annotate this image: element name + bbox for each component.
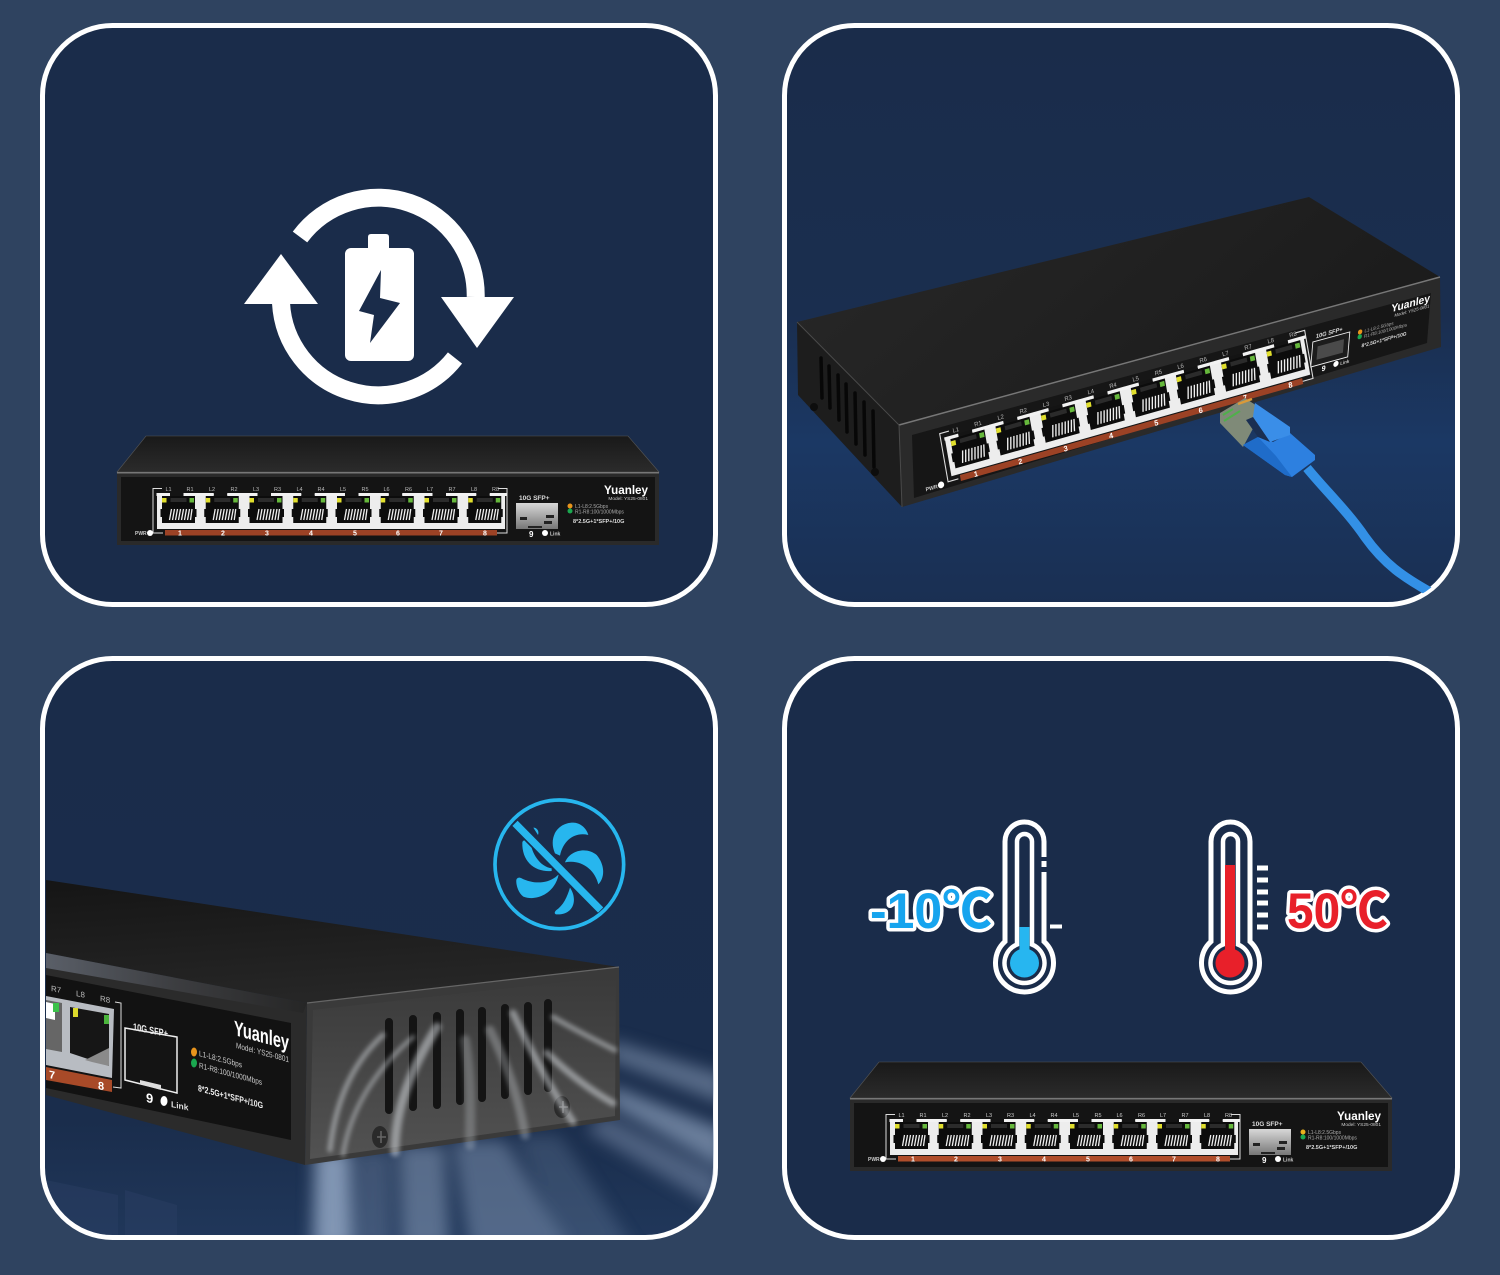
switch: front view: R3 (1007, 1113, 1014, 1119)
switch: close-up of vented side: R7 (51, 984, 62, 995)
switch: front view: 3 (265, 530, 269, 538)
panel: RJ45 connection (784, 26, 1458, 604)
switch: front view: L5 (1073, 1113, 1079, 1119)
switch: front view: Link (1283, 1158, 1293, 1164)
switch: angled view: L2 (997, 414, 1005, 422)
switch: close-up of vented side: 8*2.5G+1*SFP+/10G (198, 1083, 263, 1111)
airflow across vents (330, 1013, 615, 1155)
side face (305, 967, 620, 1165)
switch: angled view: PWR (925, 484, 938, 493)
switch: front view: PWR (868, 1157, 880, 1163)
switch: angled view: L1 (952, 427, 960, 435)
icon: no fan (495, 800, 624, 929)
switch: angled view: 5 (1154, 418, 1159, 428)
switch: front view: 9 (529, 530, 534, 539)
switch: front view: R1 (186, 487, 194, 493)
switch: angled view: 10G SFP+ (1316, 326, 1343, 340)
switch: front view: R1-R8:100/1000Mbps (1308, 1136, 1357, 1142)
switch: angled view: Link (1340, 358, 1350, 366)
switch: front view: Yuanley (1337, 1111, 1382, 1123)
switch: front view: L5 (340, 487, 346, 493)
switch: front view: L1-L8:2.5Gbps (1308, 1130, 1342, 1136)
switch: front view: 7 (439, 530, 443, 538)
switch: front view: L1-L8:2.5Gbps (575, 504, 609, 510)
switch: front view: 7 (1172, 1156, 1176, 1164)
switch: front view: 6 (1129, 1156, 1133, 1164)
switch: front view: L4 (1029, 1113, 1036, 1119)
floor reflection (46, 1180, 110, 1235)
switch: front view: 4 (1042, 1156, 1046, 1164)
switch: angled view: 3 (1063, 444, 1068, 454)
switch: close-up of vented side (46, 880, 725, 1250)
switch: angled view (797, 197, 1441, 507)
switch: front view: L8 (471, 487, 477, 493)
switch: angled view: L1-L8:2.5Gbps (1364, 320, 1394, 334)
switch: angled view: R7 (1244, 344, 1253, 352)
switch: front view: 5 (353, 530, 357, 538)
vents (389, 1003, 548, 1110)
switch: front view: 4 (309, 530, 313, 538)
port 8 and port 7 (46, 996, 114, 1078)
switch: angled view: Yuanley (1391, 293, 1430, 315)
switch: close-up of vented side: 10G SFP+ (133, 1022, 168, 1040)
switch: front view: L1 (898, 1113, 905, 1119)
switch: front view: L2 (209, 487, 215, 493)
switch: angled view: 4 (1108, 431, 1115, 441)
switch: front view: 1 (911, 1156, 915, 1164)
switch: front view: L2 (942, 1113, 948, 1119)
switch: angled view: R5 (1154, 369, 1163, 378)
switch: front view: 6 (396, 530, 400, 538)
switch: close-up of vented side: L8 (76, 989, 85, 1000)
switch: close-up of vented side: 7 (49, 1069, 55, 1082)
switch: front view: R4 (317, 487, 325, 493)
switch: front view: L3 (986, 1113, 992, 1119)
switch: angled view: L4 (1087, 389, 1095, 397)
switch: front view: 8*2.5G+1*SFP+/10G (1306, 1145, 1357, 1151)
switch: front view: R3 (274, 487, 281, 493)
switch: front view: 5 (1086, 1156, 1090, 1164)
icon: battery with cycle arrows (244, 198, 514, 395)
switch: front view: L4 (296, 487, 303, 493)
switch: close-up of vented side: R1-R8:100/1000Mbps (199, 1061, 262, 1087)
switch: front view: R8 (1225, 1113, 1232, 1119)
switch: angled view: 8 (1288, 380, 1293, 390)
label: 50 degrees: 50℃ (1287, 883, 1388, 939)
switch: front view (850, 1062, 1392, 1171)
switch: close-up of vented side: 9 (146, 1090, 153, 1106)
switch: front view: 8 (483, 530, 487, 538)
switch: angled view: R2 (1019, 408, 1028, 416)
switch: angled view: L7 (1222, 350, 1230, 358)
switch: angled view: R6 (1199, 357, 1208, 365)
panel: battery saving (42, 26, 716, 604)
switch: front view: 8 (1216, 1156, 1220, 1164)
switch: angled view: R1 (974, 420, 983, 429)
switch: angled view: 8*2.5G+1*SFP+/10G (1361, 331, 1407, 350)
switch: angled view: 7 (1242, 393, 1248, 403)
switch: front view: L6 (1116, 1113, 1123, 1119)
switch: angled view: R8 (1289, 331, 1298, 339)
switch: front view: R5 (361, 487, 369, 493)
panel: wide temperature range (784, 658, 1458, 1238)
switch: front view: L8 (1204, 1113, 1210, 1119)
switch: angled view: R4 (1109, 382, 1118, 390)
switch: angled view: R1-R8:100/1000Mbps (1364, 322, 1408, 339)
switch: front view: R6 (405, 487, 412, 493)
switch: front view: R1 (919, 1113, 927, 1119)
switch: front view: Link (550, 532, 560, 538)
switch: close-up of vented side: L1-L8:2.5Gbps (199, 1049, 242, 1070)
top face (46, 880, 619, 1003)
switch: front view: L7 (1160, 1113, 1166, 1119)
brand and spec text (191, 1048, 197, 1056)
blue network cable (1220, 398, 1430, 592)
switch: front view: 2 (954, 1156, 958, 1164)
switch: angled view: Model: YS25-0801 (1394, 303, 1430, 318)
switch: front view: R2 (230, 487, 238, 493)
switch: front view: R5 (1094, 1113, 1102, 1119)
switch: close-up of vented side: Link (171, 1099, 189, 1113)
switch: front view: 1 (178, 530, 182, 538)
switch: close-up of vented side: R8 (100, 994, 111, 1005)
switch: front view: R2 (963, 1113, 971, 1119)
switch: angled view: 2 (1017, 456, 1023, 467)
switch: front view: Model: YS25-0801 (608, 496, 648, 502)
switch: front view: Model: YS25-0801 (1341, 1122, 1381, 1128)
switch: front view: 9 (1262, 1156, 1267, 1165)
switch: front view: L1 (165, 487, 172, 493)
switch: front view: R7 (448, 487, 456, 493)
SFP port (125, 1028, 177, 1093)
switch: angled view: L5 (1132, 376, 1140, 384)
switch: front view: R4 (1050, 1113, 1058, 1119)
switch: angled view: L6 (1177, 363, 1185, 371)
switch: angled view: L3 (1042, 401, 1050, 409)
switch: front view: L6 (383, 487, 390, 493)
front face (46, 953, 307, 1165)
switch: close-up of vented side: Model: YS25-0801 (236, 1041, 289, 1064)
icon: hot thermometer (1202, 822, 1268, 992)
switch: close-up of vented side: Yuanley (234, 1016, 289, 1055)
switch: front view: 2 (221, 530, 225, 538)
switch: front view: 8*2.5G+1*SFP+/10G (573, 519, 624, 525)
airflow below and beside the chassis (313, 1040, 725, 1250)
switch: front view: PWR (135, 531, 147, 537)
switch: front view: R7 (1181, 1113, 1189, 1119)
panel: fanless cooling (42, 658, 725, 1250)
switch: front view: L7 (427, 487, 433, 493)
switch: front view: Yuanley (604, 485, 649, 497)
switch: front view: 3 (998, 1156, 1002, 1164)
switch: front view: R8 (492, 487, 499, 493)
switch: front view: 10G SFP+ (1252, 1121, 1283, 1128)
switch: front view (117, 436, 659, 545)
switch: angled view: R3 (1064, 395, 1073, 403)
switch: angled view: 6 (1198, 405, 1204, 415)
switch: front view: L3 (253, 487, 259, 493)
screws (372, 1096, 570, 1148)
switch: front view: R1-R8:100/1000Mbps (575, 510, 624, 516)
switch: front view: 10G SFP+ (519, 495, 550, 502)
switch: angled view: 9 (1321, 363, 1326, 374)
switch: angled view: 1 (973, 469, 979, 479)
label: minus 10 degrees: -10℃ (870, 883, 992, 939)
switch: close-up of vented side: 8 (98, 1080, 104, 1093)
switch: angled view: L8 (1267, 338, 1275, 346)
icon: cold thermometer (995, 822, 1062, 992)
switch: front view: R6 (1138, 1113, 1145, 1119)
